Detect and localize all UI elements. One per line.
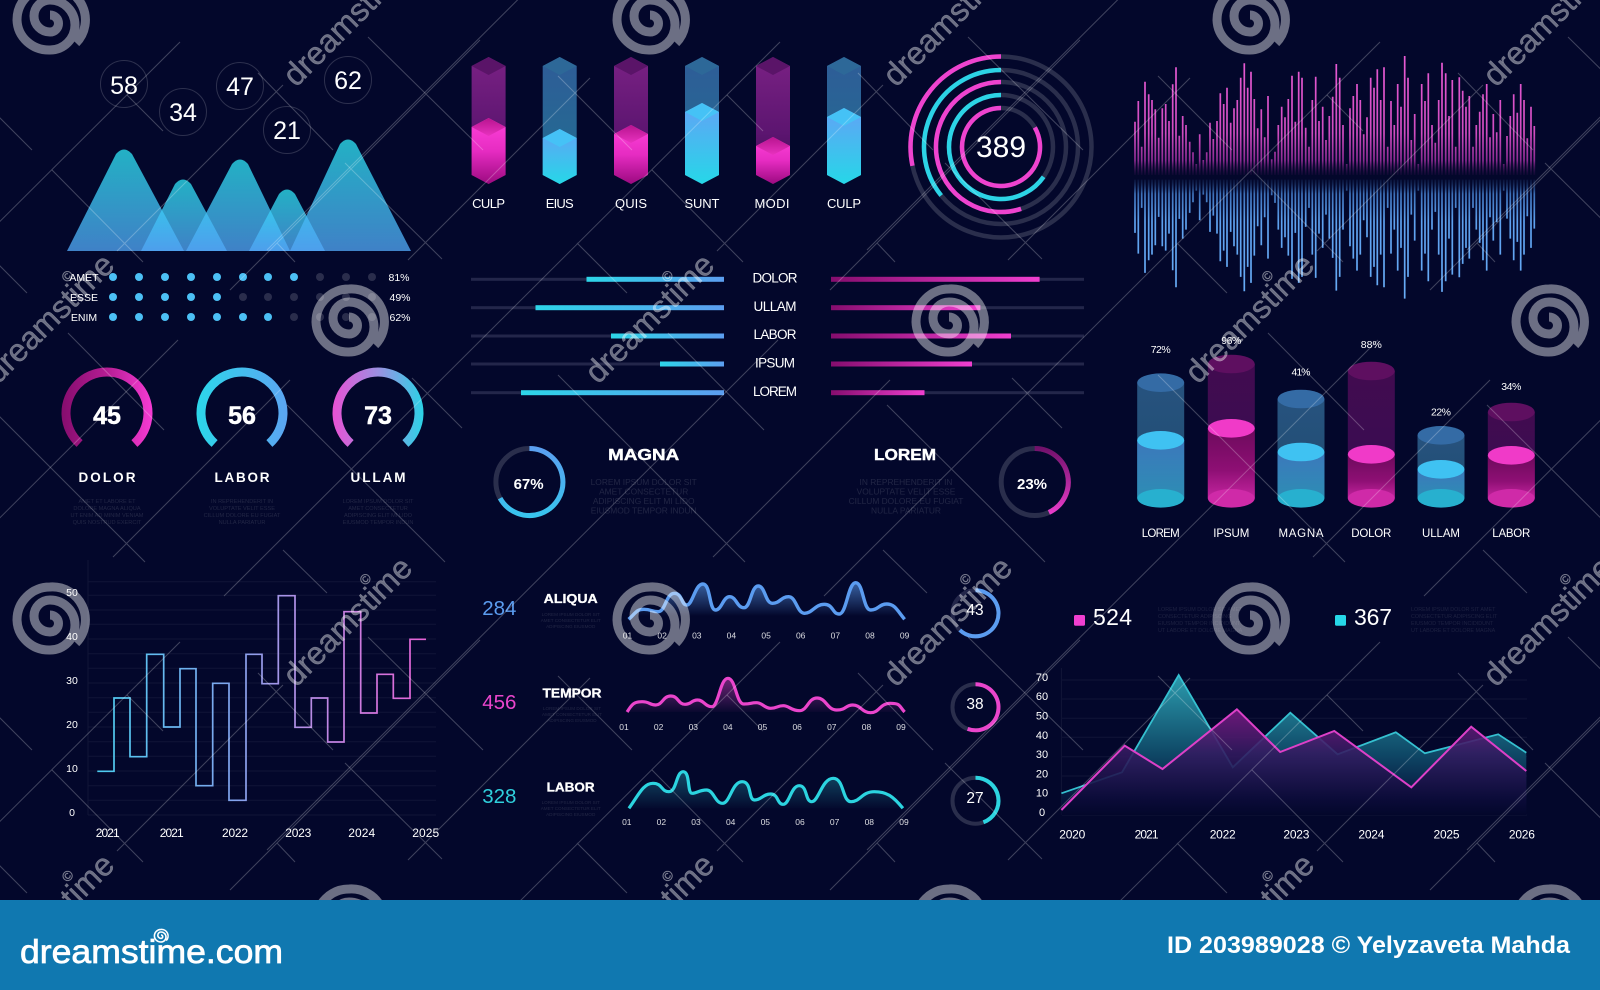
area x axis: 2024 [1358, 827, 1385, 841]
area y axis [1036, 672, 1048, 819]
column labels: MODI [754, 196, 790, 211]
watermark: dreamstime text: dreamstime [275, 549, 419, 693]
aliqua heading: ALIQUA [544, 592, 598, 606]
left blue bars [521, 277, 724, 395]
tempor axis [619, 722, 906, 732]
watermark: dreamstime text: time [1253, 846, 1321, 915]
cylinder dolor [1348, 362, 1395, 508]
cylinder labels: LOREM [1142, 528, 1180, 540]
step chart y axis: 10 [66, 763, 78, 775]
gauge headings [78, 470, 406, 485]
bubble values: 47 [226, 73, 254, 101]
aliqua caption: LOREM IPSUM DOLOR SIT [542, 612, 600, 617]
aliqua axis: 06 [796, 630, 806, 640]
lorem arc [1035, 448, 1068, 512]
labor heading: LABOR [547, 781, 595, 795]
waveform lower bars [1135, 180, 1534, 299]
lorem heading: LOREM [874, 447, 936, 464]
dot row labels [69, 272, 411, 324]
aliqua line [629, 583, 905, 619]
panel: sparkline labor [482, 772, 998, 827]
tempor axis: 02 [654, 722, 664, 732]
magna value: 67% [514, 476, 544, 493]
magna track [496, 448, 563, 516]
aliqua value: 284 [482, 597, 516, 620]
legend pink: 524 [1093, 604, 1132, 630]
cylinder percentages [1151, 335, 1521, 419]
cylinder percentages: 88% [1361, 339, 1382, 351]
panel: lorem ring [849, 447, 1068, 516]
labor axis: 09 [899, 817, 909, 827]
legend pink caption: LOREM IPSUM DOLOR SIT AMET [1158, 607, 1243, 613]
column labels: CULP [472, 196, 505, 211]
panel: sparkline tempor [482, 678, 999, 732]
dot row labels: ENIM [71, 312, 97, 324]
tempor caption: AMET CONSECTETUR ELIT [542, 712, 602, 717]
tempor axis: 03 [689, 722, 698, 732]
watermark: dreamstime text: © [956, 569, 975, 588]
labor axis: 07 [830, 817, 840, 827]
labor caption: AMET CONSECTETUR ELIT [541, 806, 601, 811]
tempor line [627, 678, 905, 713]
tempor axis: 08 [862, 722, 871, 732]
aliqua caption: AMET CONSECTETUR ELIT [541, 618, 601, 623]
tempor axis: 09 [896, 722, 906, 732]
step chart y axis: 50 [66, 587, 78, 599]
area x axis: 2025 [1434, 827, 1460, 841]
magna arc [500, 448, 563, 515]
watermark: dreamstime text: time [53, 846, 121, 915]
legend cyan caption: EIUSMOD TEMPOR INCIDIDUNT [1411, 621, 1494, 627]
cylinder percentages: 34% [1501, 381, 1521, 393]
labor caption [541, 800, 601, 817]
panel: sparkline aliqua [482, 583, 999, 640]
step chart y axis: 40 [66, 631, 78, 643]
labor ring: 27 [966, 790, 984, 807]
column labels: EIUS [546, 196, 574, 211]
area y axis: 40 [1036, 730, 1048, 742]
bubble values: 58 [110, 72, 138, 100]
labor line [629, 772, 903, 808]
legend cyan: 367 [1354, 604, 1392, 630]
cylinder labels: IPSUM [1213, 528, 1249, 540]
panel: audio waveform [1135, 56, 1534, 299]
tempor ring [952, 684, 999, 730]
tempor heading: TEMPOR [542, 687, 602, 701]
inactive dots [239, 273, 376, 321]
cylinder labels: ULLAM [1422, 528, 1460, 540]
watermark: dreamstime text: © [1556, 569, 1575, 588]
panel: radial chart [910, 56, 1092, 238]
bubble values [110, 67, 362, 145]
tempor axis: 05 [758, 722, 767, 732]
step chart x axis: 2023 [285, 826, 312, 840]
dot row labels: 49% [389, 292, 411, 304]
panel: area chart [1036, 604, 1535, 841]
area x axis [1059, 827, 1535, 841]
labor axis: 06 [795, 817, 805, 827]
cylinder magna [1278, 390, 1324, 508]
cylinder ullam [1418, 426, 1464, 508]
panel: step line chart [66, 560, 440, 840]
gauge captions: LOREM IPSUM DOLOR SIT [343, 499, 414, 505]
gauge values: 73 [364, 402, 392, 430]
footer credit: ID 203989028 © Yelyzaveta Mahda [1167, 932, 1570, 959]
cylinder percentages: 41% [1292, 367, 1310, 379]
bubble values: 34 [169, 99, 197, 127]
aliqua axis: 03 [692, 630, 702, 640]
watermark: dreamstime text: time [653, 846, 721, 915]
cylinder lorem [1137, 373, 1184, 508]
magna caption [591, 477, 697, 516]
right pink bars [831, 277, 1040, 395]
panel: magna ring [496, 447, 697, 516]
magna heading: MAGNA [608, 447, 679, 464]
footer logo text: dreamstime.com [20, 933, 283, 970]
column fills [472, 103, 861, 184]
column backgrounds [472, 57, 861, 184]
bubble values: 21 [273, 117, 301, 145]
tempor axis: 06 [792, 722, 802, 732]
labor axis: 01 [622, 817, 632, 827]
bar labels: LABOR [754, 327, 797, 342]
aliqua axis: 02 [657, 630, 667, 640]
panel: gauges [66, 372, 419, 526]
labor caption: ADIPISCING EIUSMOD [546, 812, 596, 817]
lorem caption: NULLA PARIATUR [871, 506, 941, 516]
gauge captions: NULLA PARIATUR [219, 520, 265, 526]
area y axis: 50 [1036, 710, 1048, 722]
gauge values: 56 [228, 402, 256, 430]
area x axis: 2023 [1283, 827, 1310, 841]
tempor caption: ADIPISCING EIUSMOD [547, 718, 597, 723]
dot row labels: ESSE [70, 292, 98, 304]
gauge values: 45 [93, 402, 121, 430]
pink series [1061, 709, 1526, 815]
step chart y axis: 20 [66, 719, 78, 731]
panel: mountain chart [67, 56, 411, 324]
bar labels: LOREM [753, 384, 797, 399]
step chart x axis: 2025 [412, 826, 440, 840]
cylinder labels [1142, 528, 1530, 540]
labor axis: 02 [657, 817, 666, 827]
gauge headings: DOLOR [78, 470, 136, 485]
labor area [629, 772, 903, 808]
gauge captions: QUIS NOSTRUD EXERCIT [73, 520, 142, 526]
tempor axis: 01 [619, 722, 629, 732]
area x axis: 2021 [1135, 827, 1159, 841]
lorem value: 23% [1017, 476, 1047, 493]
magna caption: EIUSMOD TEMPOR INDUN [591, 506, 697, 516]
watermark: dreamstime text: © [658, 266, 677, 285]
labor axis: 03 [691, 817, 701, 827]
step line [97, 596, 426, 800]
tempor area [627, 678, 905, 713]
watermark: dreamstime text: © [58, 266, 77, 285]
area y axis: 60 [1036, 691, 1048, 703]
radial tracks [910, 56, 1092, 238]
aliqua ring: 43 [966, 602, 984, 619]
dot row labels: 81% [388, 272, 410, 284]
gauge values [93, 402, 392, 430]
panel: cylinder chart [1137, 335, 1535, 540]
dot row labels: 62% [389, 312, 411, 324]
lorem caption: IN REPREHENDERIT IN [860, 477, 952, 487]
legend cyan caption [1411, 607, 1498, 634]
labor axis [622, 817, 909, 827]
tempor value: 456 [482, 691, 516, 714]
watermark: dreamstime text: © [658, 866, 677, 885]
panel: hexagonal column chart [472, 57, 861, 211]
cylinder percentages: 72% [1151, 344, 1171, 356]
area x axis: 2020 [1059, 827, 1086, 841]
tempor axis: 07 [827, 722, 837, 732]
cylinder labor [1488, 403, 1535, 508]
step chart x axis: 2022 [222, 826, 248, 840]
tempor axis: 04 [723, 722, 733, 732]
watermark: dreamstime text: © [1258, 266, 1277, 285]
aliqua axis: 05 [761, 630, 771, 640]
cylinder percentages: 96% [1221, 335, 1241, 347]
area y axis: 30 [1036, 749, 1048, 761]
legend pink caption: UT LABORE ET DOLORE MAGNA [1158, 628, 1243, 634]
tempor caption: LOREM IPSUM DOLOR SIT [543, 706, 601, 711]
waveform upper bars [1135, 56, 1534, 175]
gauge captions: CILLUM DOLORE EU FUGIAT [204, 513, 281, 519]
labor caption: LOREM IPSUM DOLOR SIT [542, 800, 600, 805]
magna caption: AMET CONSECTETUR [599, 486, 688, 496]
mountain shapes [67, 140, 411, 251]
radial value: 389 [976, 131, 1026, 164]
step chart x axis: 2024 [348, 826, 376, 840]
cylinder labels: MAGNA [1278, 528, 1324, 540]
lorem caption: VOLUPTATE VELIT ESSE [857, 486, 956, 496]
gauge captions: UT ENIM AD MINIM VENIAM [71, 513, 144, 519]
gauge captions: DOLORE MAGNA ALIQUA [73, 506, 141, 512]
value bubbles [100, 56, 372, 154]
bar labels: IPSUM [755, 356, 795, 370]
aliqua axis [623, 630, 910, 640]
lorem track [1001, 448, 1068, 516]
aliqua axis: 01 [623, 630, 632, 640]
cylinder percentages: 22% [1431, 407, 1451, 419]
column labels: QUIS [615, 196, 647, 211]
labor axis: 04 [726, 817, 736, 827]
aliqua area [629, 583, 905, 619]
area grid [1061, 668, 1527, 815]
gauge headings: LABOR [214, 470, 270, 485]
aliqua caption [541, 612, 601, 629]
aliqua caption: ADIPISCING EIUSMOD [546, 624, 596, 629]
aliqua axis: 09 [900, 630, 910, 640]
area x axis: 2022 [1210, 827, 1236, 841]
labor axis: 05 [761, 817, 770, 827]
area y axis: 20 [1036, 768, 1048, 780]
bar labels [752, 270, 798, 399]
magna caption: ADIPISCING ELIT MI LIDO [593, 496, 695, 506]
watermark: dreamstime text: © [1258, 866, 1277, 885]
legend pink caption [1158, 607, 1243, 634]
watermark: dreamstime text: © [58, 866, 77, 885]
gauge captions [71, 499, 414, 526]
aliqua axis: 04 [727, 630, 736, 640]
radial arcs [911, 56, 1044, 212]
column caps [472, 57, 861, 75]
watermark: dreamstime text: dreamstime [577, 246, 721, 390]
column labels: SUNT [684, 196, 720, 211]
legend cyan [1335, 604, 1392, 630]
lorem caption [849, 477, 963, 516]
footer bar [0, 900, 1600, 990]
watermark: dreamstime text: © [356, 569, 375, 588]
area y axis: 0 [1039, 807, 1045, 819]
cylinder labels: LABOR [1492, 528, 1530, 540]
bubble values: 62 [334, 67, 362, 95]
cyan series [1061, 675, 1526, 815]
gauge headings: ULLAM [350, 470, 406, 485]
labor ring [952, 778, 998, 824]
panel: horizontal bars [471, 270, 1084, 399]
cylinder ipsum [1208, 355, 1255, 508]
legend cyan caption: LOREM IPSUM DOLOR SIT AMET [1411, 607, 1496, 613]
aliqua axis: 08 [865, 630, 875, 640]
step chart y axis: 30 [66, 675, 78, 687]
watermark: dreamstime text: dreamstime [1177, 246, 1321, 390]
bar labels: DOLOR [752, 270, 798, 286]
labor value: 328 [482, 785, 516, 808]
step chart y axis [66, 587, 78, 819]
gauge captions: AMET CONSECTETUR [348, 506, 408, 512]
bar labels: ULLAM [754, 299, 796, 314]
step chart x axis [96, 826, 440, 840]
cylinder labels: DOLOR [1351, 528, 1391, 540]
gauge captions: EIUSMOD TEMPOR INDUN [343, 520, 413, 526]
area y axis: 10 [1036, 788, 1048, 800]
fill tops [472, 103, 861, 155]
tempor caption [542, 706, 602, 723]
aliqua ring [952, 590, 999, 636]
step chart x axis: 2021 [96, 826, 120, 840]
legend pink caption: EIUSMOD TEMPOR INCIDIDUNT [1158, 621, 1241, 627]
magna caption: LOREM IPSUM DOLOR SIT [591, 477, 697, 487]
step chart y axis: 0 [69, 807, 75, 819]
gauge arcs [66, 372, 419, 444]
tempor ring: 38 [966, 696, 984, 713]
column labels: CULP [827, 196, 861, 211]
labor axis: 08 [865, 817, 874, 827]
gauge captions: AMET ET LABORE ET [78, 499, 136, 505]
watermark: dreamstime text: dreamstime [875, 549, 1019, 693]
step chart x axis: 2021 [160, 826, 184, 840]
column labels [472, 196, 861, 211]
legend pink caption: CONSECTETUR ADIPISCING [1158, 614, 1231, 620]
gauge captions: VOLUPTATE VELIT ESSE [209, 506, 275, 512]
gauge captions: IN REPREHENDERIT IN [211, 499, 273, 505]
footer logo spiral [154, 929, 168, 942]
area y axis: 70 [1036, 672, 1048, 684]
bar tracks [471, 278, 1084, 394]
legend cyan caption: CONSECTETUR ADIPISCING ELIT [1411, 614, 1498, 620]
step chart grid [88, 560, 436, 815]
legend pink [1074, 604, 1132, 630]
dot row labels: AMET [69, 272, 99, 284]
lorem caption: CILLUM DOLORE EU FUGIAT [849, 496, 963, 506]
legend cyan caption: UT LABORE ET DOLORE MAGNA [1411, 628, 1496, 634]
area x axis: 2026 [1509, 827, 1535, 841]
aliqua axis: 07 [831, 630, 840, 640]
dot rows [109, 273, 298, 321]
gauge captions: ADIPISCING ELIT MI LIDO [344, 513, 413, 519]
